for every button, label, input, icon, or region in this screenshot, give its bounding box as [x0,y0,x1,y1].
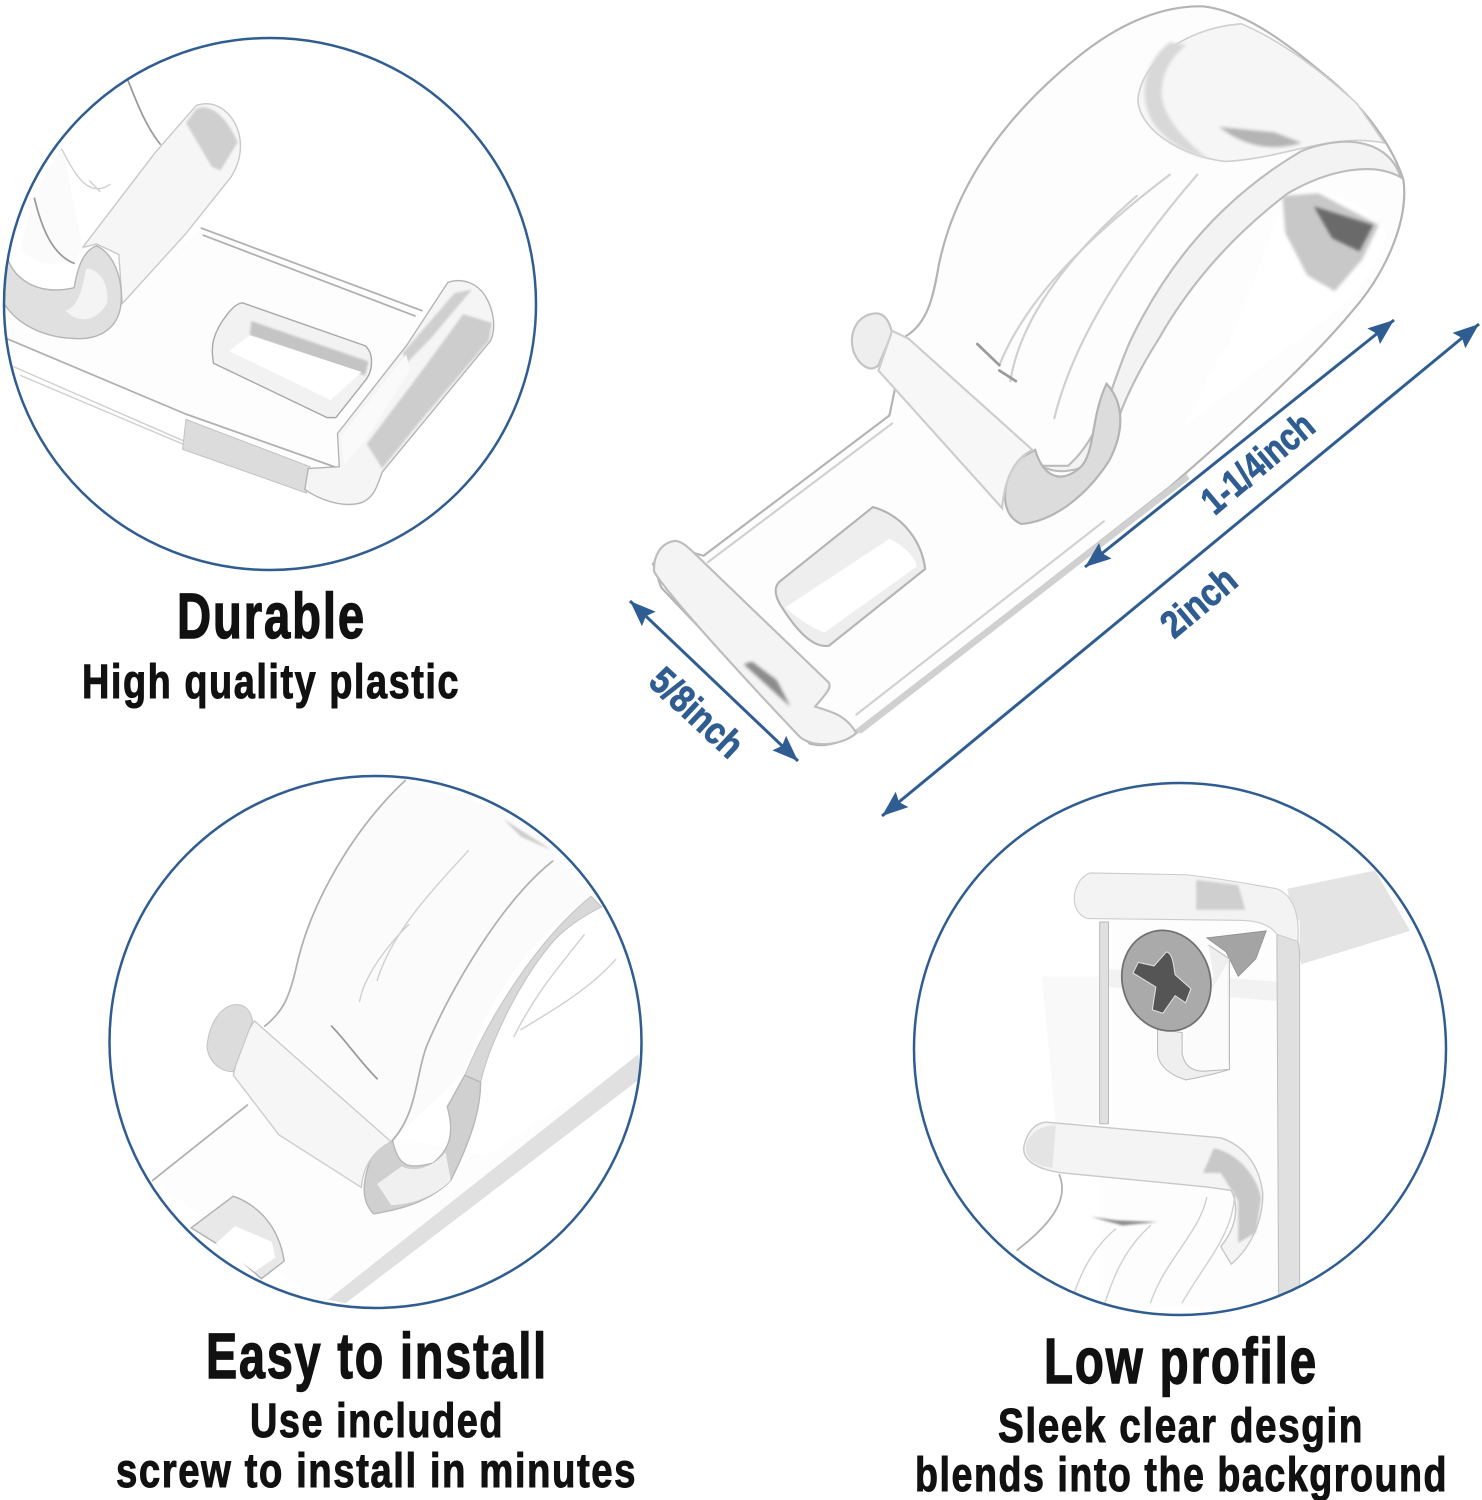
curled end [364,1075,481,1214]
text: screw to install in minutes: screw to install in minutes [116,1445,637,1498]
panel: easy to install close-up circle [110,776,642,1308]
strap outer edge [265,781,405,1026]
plate bottom inner line [856,521,1104,715]
circle outline [914,783,1446,1315]
slot [1158,945,1229,1080]
plate top edge [153,1105,247,1180]
end bar of clip [654,541,856,744]
plate bottom edge [7,339,339,469]
strap inner edge [391,861,553,1142]
circle outline [110,776,642,1308]
hinge cap detail [186,107,238,170]
front band [465,896,602,1082]
lower curl of the strap [1005,384,1120,524]
lower bar cap shading [1026,1126,1056,1168]
end bar shaded side [367,314,492,469]
clip body silhouette [653,6,1404,745]
hinge bar [233,1021,391,1187]
faint wall reflection [1042,976,1108,1124]
strap body [265,781,591,1142]
strap thin line [34,81,160,263]
plate top edge second line [708,423,892,562]
lower bar [1024,1122,1263,1264]
main product photo: clear clip with dimensions [653,6,1404,745]
heading: Easy to install: Easy to install [206,1320,548,1392]
top pocket of the loop [1138,24,1384,161]
slot inner shadow [250,321,369,376]
rim shadow of the pocket [1145,42,1208,159]
circle outline [4,38,536,570]
curled end of strap [0,246,121,339]
screw thread [1207,931,1266,976]
slot opening [229,335,362,400]
plate of the clip [0,228,422,469]
darkest reflection [1314,206,1373,251]
slot [191,1196,284,1279]
slot opening [785,539,917,633]
front band of the loop [1041,142,1401,471]
smudge in the pocket [1219,127,1302,147]
hinge bar across the clip [878,331,1032,508]
white rod behind clip [1287,871,1410,964]
strap crease marks [332,1026,377,1079]
loop opening [1181,191,1387,429]
plate [153,1054,640,1307]
heading: Durable: Durable [177,580,366,652]
dimension arrow: 5/8 inch [630,601,798,767]
panel: durable close-up circle [0,38,536,570]
strap interior [81,246,83,248]
heading: Low profile: Low profile [1044,1325,1318,1397]
slot [212,303,372,418]
dimension arrow: 1-1/4 inch: 1-1/4inch [1193,405,1323,523]
lower corner highlight [404,354,408,364]
plate top edge [201,228,422,316]
slot in plate [776,507,925,646]
plate left edge [1100,922,1108,1124]
faint lower ridges [14,367,183,444]
curl highlight [65,269,107,319]
slot opening [216,1226,275,1272]
screw head [1109,919,1224,1043]
hinge cap [207,1005,253,1072]
strap cracks [62,149,110,191]
phillips recess [1133,952,1191,1013]
text: Sleek clear desgin: Sleek clear desgin [998,1400,1364,1453]
end bar reflection [744,662,790,707]
plate right band [1277,920,1300,1299]
dimension arrow: 1-1/4 inch [1085,320,1394,567]
text: High quality plastic: High quality plastic [82,656,460,709]
top cap shadow [1196,880,1245,910]
dimension arrow: 2 inch [882,324,1479,816]
strap lines going down [1017,1175,1062,1250]
plate front edge band [851,474,1190,733]
lower bar shaded end [1203,1148,1261,1243]
slot glass [1184,962,1228,1069]
horizontal glass reflection [1108,969,1277,1001]
hinge pin cap [852,313,892,368]
curl highlight [377,1152,451,1205]
shaded plate side [183,419,310,493]
plate bottom band [328,1054,640,1303]
dimension arrow: 2 inch: 2inch [1153,559,1246,647]
strap ridge lines [977,175,1197,418]
top smudge [505,820,550,850]
hinge bar [83,104,240,304]
right end bar [305,281,494,504]
strap crease [1091,1217,1158,1226]
dimension arrow: 5/8 inch: 5/8inch [641,660,751,767]
text: Use included: Use included [250,1395,504,1448]
reflection around the opening [1283,193,1379,291]
end bar texture [403,290,472,363]
panel: low profile close-up circle [914,783,1446,1315]
ridge lines [360,851,616,1037]
plate [1298,920,1300,946]
top cap of plate [1074,873,1298,941]
